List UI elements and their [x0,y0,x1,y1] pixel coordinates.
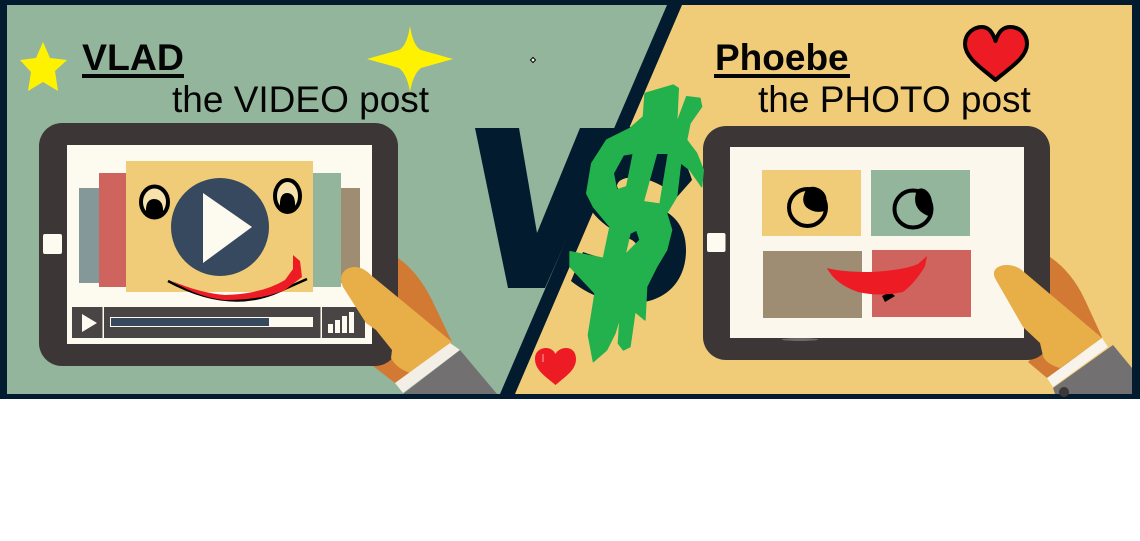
doodle: smile [168,255,307,300]
subheading: the VIDEO post: the VIDEO post [172,79,430,120]
hand behind tablet [1028,257,1102,378]
panel: photo side background [515,5,1132,394]
photo tile: tan [763,251,862,318]
video tablet illustration [39,123,497,394]
infographic: video post versus photo post [0,0,1140,399]
hand behind tablet [373,258,452,383]
letter V [475,128,616,288]
video card: grey-blue [79,188,99,283]
video player control bar [72,307,365,338]
tablet body [39,123,398,366]
tablet screen glint [782,338,818,341]
tablet screen [730,147,1024,338]
icon: small red heart [535,348,576,385]
hand: jacket sleeve [403,350,497,394]
hand: shirt cuff [1047,338,1108,387]
tablet screen [67,145,372,344]
subheading: the PHOTO post: the PHOTO post [758,79,1032,120]
hand: thumb [341,267,452,373]
doodle: left eye [141,186,168,218]
doodle: left eye [789,187,827,226]
video card: red [99,173,126,287]
icon: yellow five-point star [20,42,67,91]
hand: jacket sleeve [1053,345,1132,394]
photo tile: yellow [762,170,861,236]
tablet body [703,126,1050,360]
play button [171,178,269,276]
heading: Phoebe: Phoebe [715,37,849,78]
tablet home button [707,233,726,252]
video card: green [313,173,341,287]
heading: VLAD: VLAD [82,37,184,78]
doodle: green dollar sign [570,85,703,362]
doodle: lips [827,256,927,302]
VS lettering [475,127,692,303]
panel: video side background [7,5,667,394]
hand: thumb [994,265,1102,368]
jacket button [1059,387,1069,397]
doodle: right eye [894,188,932,228]
icon: large outlined heart [965,27,1027,80]
tablet home button [43,234,62,254]
video card: tan [341,188,360,283]
hand: shirt cuff [395,343,460,393]
photo tile: red [872,250,971,317]
video card: yellow centre [126,161,313,292]
icon: yellow four-point star [367,26,453,92]
tiny diamond mark [530,58,536,62]
photo tile: green [871,170,970,236]
banner frame [0,0,1140,399]
doodle: right eye [275,180,300,212]
letter S [571,127,692,303]
photo tablet illustration [703,126,1132,397]
